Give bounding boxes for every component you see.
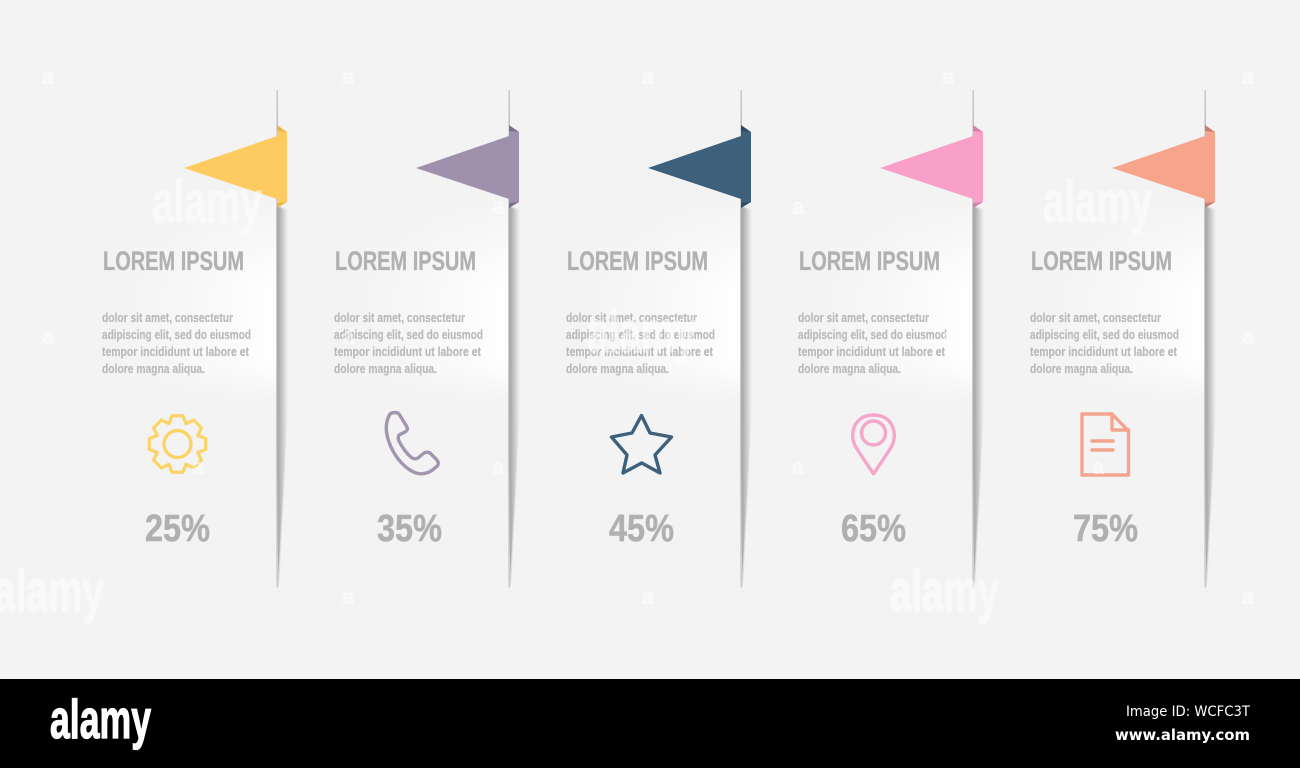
flag: purple: [416, 125, 519, 208]
watermarks: a: [42, 64, 55, 89]
text block: step 1: tempor incididunt ut labore et: [102, 344, 250, 359]
watermarks: alamy: [1043, 170, 1152, 235]
text block: step 5: adipiscing elit, sed do eiusmod: [1030, 327, 1179, 342]
text block: step 4: tempor incididunt ut labore et: [798, 344, 946, 359]
watermarks: a: [342, 584, 355, 609]
text block: step 4: adipiscing elit, sed do eiusmod: [798, 327, 947, 342]
website: www.alamy.com: [1115, 726, 1250, 744]
percentage: 75%: 75%: [1073, 508, 1138, 550]
watermarks: a: [792, 194, 805, 219]
text block: step 5: tempor incididunt ut labore et: [1030, 344, 1178, 359]
watermarks: a: [1092, 454, 1105, 479]
watermarks: a: [42, 324, 55, 349]
watermarks: alamy: [587, 300, 696, 365]
watermarks: a: [792, 454, 805, 479]
heading: step 2: LOREM IPSUM: [335, 246, 476, 276]
watermarks: a: [492, 194, 505, 219]
watermarks: a: [942, 64, 955, 89]
footer logo: alamy: [50, 688, 151, 750]
text block: step 2: adipiscing elit, sed do eiusmod: [334, 327, 483, 342]
watermarks: a: [942, 324, 955, 349]
icon: document: [1082, 414, 1128, 475]
watermarks: a: [42, 584, 55, 609]
panel: step 5: [1025, 90, 1216, 588]
text block: step 4: [798, 310, 947, 376]
footer bar: [0, 679, 1300, 768]
watermarks: a: [192, 454, 205, 479]
percentage: 35%: 35%: [377, 508, 442, 550]
text block: step 2: tempor incididunt ut labore et: [334, 344, 482, 359]
watermarks: alamy: [152, 170, 262, 235]
text block: step 5: [1030, 310, 1179, 376]
flag: yellow: [184, 125, 287, 208]
watermarks: a: [1242, 584, 1255, 609]
icon: phone: [386, 412, 438, 474]
text block: step 2: dolor sit amet, consectetur: [334, 310, 465, 325]
text block: step 2: [334, 310, 483, 376]
watermarks: a: [642, 64, 655, 89]
heading: step 5: LOREM IPSUM: [1031, 246, 1172, 276]
flag: salmon: [1112, 125, 1215, 208]
watermarks: a: [1242, 324, 1255, 349]
watermarks: a: [342, 324, 355, 349]
text block: step 2: dolore magna aliqua.: [334, 361, 437, 376]
panel: step 3: [561, 90, 752, 588]
text block: step 1: adipiscing elit, sed do eiusmod: [102, 327, 251, 342]
text block: step 4: dolor sit amet, consectetur: [798, 310, 929, 325]
flag: pink: [880, 125, 983, 208]
text block: step 1: [102, 310, 251, 376]
icon: star: [612, 416, 672, 473]
panel: step 1: [97, 90, 288, 588]
percentage: 25%: 25%: [145, 508, 210, 550]
text block: step 4: dolore magna aliqua.: [798, 361, 901, 376]
panel: step 4: [793, 90, 984, 588]
text block: step 5: dolore magna aliqua.: [1030, 361, 1133, 376]
heading: step 3: LOREM IPSUM: [567, 246, 708, 276]
heading: step 1: LOREM IPSUM: [103, 246, 244, 276]
text block: step 3: dolor sit amet, consectetur: [566, 310, 697, 325]
text block: step 3: adipiscing elit, sed do eiusmod: [566, 327, 715, 342]
image id: Image ID: WCFC3T: [1126, 704, 1250, 720]
icon: gear: [149, 416, 206, 472]
text block: step 1: dolore magna aliqua.: [102, 361, 205, 376]
watermarks: a: [492, 454, 505, 479]
panel: step 2: [329, 90, 520, 588]
text block: step 3: [566, 310, 715, 376]
text block: step 1: dolor sit amet, consectetur: [102, 310, 233, 325]
watermarks: a: [642, 584, 655, 609]
watermarks: a: [1242, 64, 1255, 89]
text block: step 5: dolor sit amet, consectetur: [1030, 310, 1161, 325]
watermarks: [0, 64, 1255, 624]
percentage: 65%: 65%: [841, 508, 906, 550]
text block: step 3: tempor incididunt ut labore et: [566, 344, 714, 359]
heading: step 4: LOREM IPSUM: [799, 246, 940, 276]
watermarks: a: [342, 64, 355, 89]
icon: map pin: [853, 415, 894, 474]
percentage: 45%: 45%: [609, 508, 674, 550]
flag: navy: [648, 125, 751, 208]
text block: step 3: dolore magna aliqua.: [566, 361, 669, 376]
watermarks: alamy: [890, 559, 999, 624]
